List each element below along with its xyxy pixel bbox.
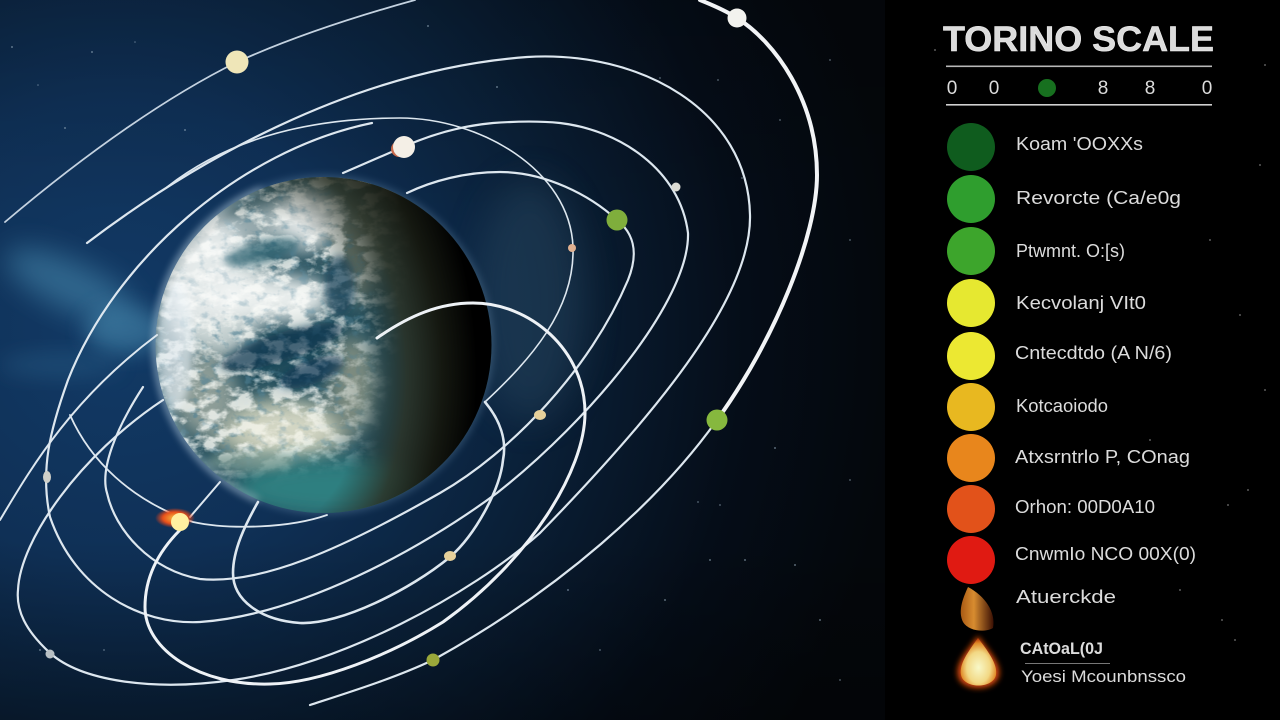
level 10 fireball <box>958 636 1186 688</box>
level 1 green <box>947 175 1181 223</box>
cloud masses <box>165 190 379 462</box>
cloud texture <box>156 177 398 485</box>
panel: torino scale legend <box>885 0 1280 720</box>
level 2 green <box>947 227 1125 275</box>
teal shallow sea <box>235 460 435 516</box>
level 4 yellow: Cntecdtdo (A N/6) <box>1015 343 1172 363</box>
orbit: far top-left arc <box>5 0 415 222</box>
orbit: loop to green planet <box>105 172 634 580</box>
level 8 red <box>947 536 1196 584</box>
level 9 flame: Atuerckde <box>1016 587 1116 607</box>
space background <box>0 0 885 720</box>
level 8 red: CnwmIo NCO 00X(0) <box>1015 544 1196 564</box>
level 0 dark green <box>947 123 1143 171</box>
night side shadow <box>150 170 500 520</box>
body: small markers <box>43 182 680 658</box>
level 2 green: Ptwmnt. O:[s) <box>1016 241 1125 261</box>
level 6 orange: Atxsrntrlo P, COnag <box>1015 447 1190 467</box>
orbit: short segment by meteor <box>190 482 220 517</box>
body: green planet right <box>706 410 728 430</box>
scale bar <box>946 66 1212 106</box>
level 10 fireball: CAtOaL(0J <box>1020 639 1103 658</box>
earth globe <box>150 170 500 520</box>
level 7 deep orange <box>947 485 1155 533</box>
scale bar: 8 <box>1098 78 1108 99</box>
level 4 yellow <box>947 332 1172 380</box>
title: TORINO SCALE <box>943 20 1214 59</box>
body: cream planet <box>226 50 248 74</box>
level 6 orange <box>947 434 1190 482</box>
orbit: left short arc <box>0 335 157 520</box>
orbit: thin arc behind earth <box>167 118 573 402</box>
orbit: meteor arc <box>70 415 327 527</box>
orbit: thick inner arc <box>145 303 585 684</box>
panel stars <box>934 49 1266 641</box>
scale bar: 8 <box>1145 78 1155 99</box>
scale bar: 0 <box>1202 78 1212 99</box>
orbit: outer upper thick arc <box>700 0 817 420</box>
body: burning meteor <box>155 508 195 531</box>
orbit: outer lower arc <box>310 420 717 705</box>
level 9 flame <box>961 587 1116 631</box>
level 0 dark green: Koam 'OOXXs <box>1016 134 1143 154</box>
body: green planet upper <box>606 210 628 230</box>
orbit: innermost arc <box>233 402 504 623</box>
orbit: large loop <box>18 56 750 685</box>
atmosphere rim <box>156 189 262 500</box>
ocean patches <box>217 232 356 395</box>
body: white planet top right <box>728 8 746 28</box>
star field <box>11 25 851 681</box>
level 3 yellow <box>947 279 1146 327</box>
body: white planet near earth <box>391 136 415 158</box>
level 5 amber: Kotcaoiodo <box>1016 396 1108 416</box>
body: small green planet <box>426 654 440 666</box>
orbit paths <box>0 0 817 705</box>
level 7 deep orange: Orhon: 00D0A10 <box>1015 497 1155 517</box>
orbit: closed middle loop <box>46 122 688 622</box>
level 5 amber <box>947 383 1108 431</box>
scale bar: 0 <box>947 78 957 99</box>
level 10 fireball: Yoesi Mcounbnssco <box>1021 667 1186 686</box>
bright cloud highlights <box>157 198 333 450</box>
scale bar: 0 <box>989 78 999 99</box>
level 1 green: Revorcte (Ca/e0g <box>1016 188 1181 208</box>
orbiting bodies <box>43 8 746 666</box>
level 3 yellow: Kecvolanj VIt0 <box>1016 293 1146 313</box>
